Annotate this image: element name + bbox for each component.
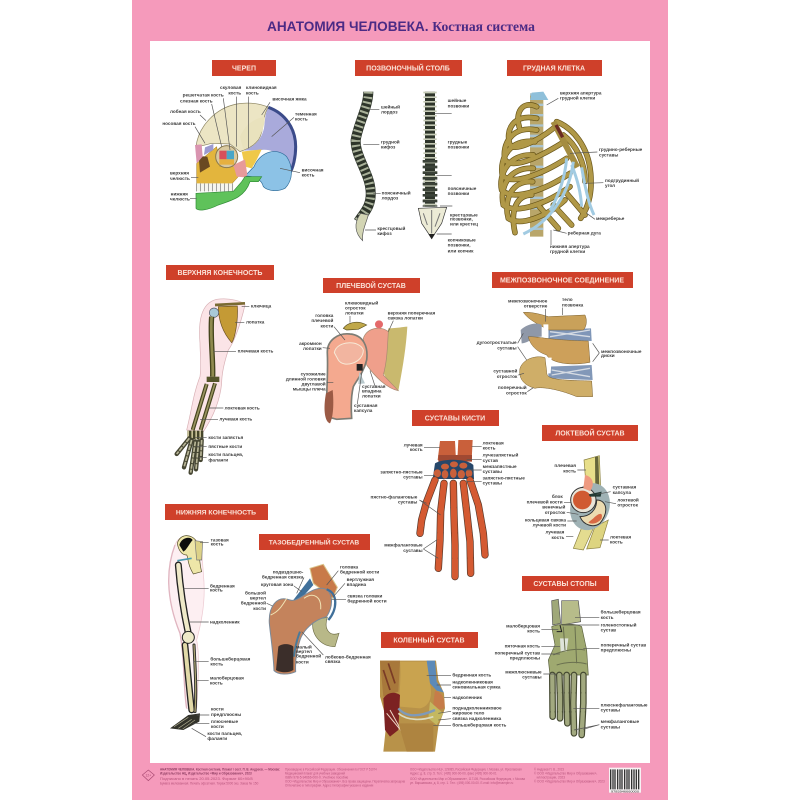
heading: lower limb xyxy=(165,504,268,520)
labels: shoulder joint: двуглавой xyxy=(301,381,326,387)
labels: hand joints xyxy=(371,440,525,558)
labels: hand joints: кость xyxy=(410,447,423,452)
labels: skull: лобная кость xyxy=(170,108,201,114)
labels: elbow joint: локтевая xyxy=(610,535,631,540)
heading: skull: ЧЕРЕП xyxy=(232,66,256,72)
labels: shoulder joint: акромион xyxy=(299,341,322,346)
labels: spine: лордоз xyxy=(381,110,398,115)
labels: elbow joint: кость xyxy=(610,540,623,545)
panel: elbow joint xyxy=(525,425,639,550)
panel: knee joint xyxy=(380,632,507,752)
labels: lower limb: кости xyxy=(211,724,224,729)
labels: shoulder joint: клювовидный xyxy=(345,300,378,306)
illustration: hand xyxy=(420,440,485,577)
labels: hand joints: суставы xyxy=(483,469,502,474)
labels: elbow joint xyxy=(525,463,639,545)
labels: intervertebral joint xyxy=(477,297,642,395)
labels: elbow joint: плечевая xyxy=(554,463,576,468)
labels: lower limb: большеберцовая xyxy=(210,656,251,662)
imprint column 4: © Андреев П. В., 2023 xyxy=(534,768,564,772)
imprint column 3: Адрес: д. 8, стр. 5. Тел.: (495) 000-00-00, факс (495) 000-00-01 xyxy=(410,772,497,776)
labels: hand joints: запястно-пястные xyxy=(483,475,525,480)
imprint column 3 xyxy=(410,768,526,785)
labels: foot joints: суставы xyxy=(601,708,620,713)
labels: skull: клиновидная xyxy=(246,85,277,90)
imprint column 2 xyxy=(285,768,406,788)
labels: spine: грудной xyxy=(381,138,400,144)
illustration: foot xyxy=(548,599,588,735)
labels: hip joint: бедренная связка xyxy=(262,574,304,580)
labels: hand joints: локтевая xyxy=(483,440,504,445)
labels: upper limb: лучевая кость xyxy=(219,417,252,422)
labels: hip joint: бедренной xyxy=(241,600,266,606)
labels: lower limb: плюсневые xyxy=(211,719,239,724)
panel: hip joint xyxy=(241,534,387,674)
labels: elbow joint: кость xyxy=(563,468,576,473)
panel: hand joints xyxy=(371,410,525,577)
labels: shoulder joint: суставная xyxy=(354,403,378,408)
labels: lower limb: кости пальцев, xyxy=(207,731,242,736)
labels: foot joints: межплюсневые xyxy=(505,669,542,674)
labels: elbow joint: капсула xyxy=(613,490,631,495)
labels: spine: позвонки xyxy=(448,144,469,149)
labels: lower limb: кости xyxy=(211,707,224,712)
labels: foot joints: суставы xyxy=(522,675,542,680)
panel: foot joints xyxy=(495,576,648,735)
labels: skull: кость xyxy=(302,173,315,178)
heading: hand joints: СУСТАВЫ КИСТИ xyxy=(425,416,485,422)
labels: spine: крестцовые xyxy=(450,213,478,218)
heading: rib cage: ГРУДНАЯ КЛЕТКА xyxy=(523,66,585,72)
panel: upper limb xyxy=(166,265,274,473)
labels: knee joint: надколенниковая xyxy=(452,680,493,685)
labels: spine: крестцовый xyxy=(377,225,405,231)
labels: hip joint: бедренной кости xyxy=(340,568,379,574)
labels: skull: кость xyxy=(228,90,241,95)
labels: skull: челюсть xyxy=(170,197,190,202)
heading: rib cage xyxy=(507,60,602,76)
heading: foot joints xyxy=(522,576,609,591)
labels: foot joints: предплюсны xyxy=(601,648,631,653)
labels: rib cage: нижняя апертура xyxy=(550,244,590,249)
labels: upper limb: кости запястья xyxy=(208,435,244,440)
heading: lower limb: НИЖНЯЯ КОНЕЧНОСТЬ xyxy=(176,510,256,516)
labels: spine: грудные xyxy=(448,139,468,144)
imprint column 2: ООО «Издательство Мир и Образование». Все права защищены. Перепечатка запрещена xyxy=(285,780,406,784)
labels: rib cage: межреберье xyxy=(596,215,625,221)
imprint column 3: ул. Варшавская, д. 8, стр. 1. Тел.: (495) 000-00-00. E-mail: info@example.ru xyxy=(410,781,513,785)
labels: upper limb: плечевая кость xyxy=(238,349,273,354)
labels: knee joint: жировое тело xyxy=(451,710,484,715)
illustration: vertebrae xyxy=(520,312,593,397)
labels: upper limb: кости пальцев, xyxy=(208,452,243,457)
imprint column 2: ISBN 978-5-94666-000-0. Учебное пособие xyxy=(285,776,348,780)
illustration: elbow xyxy=(564,456,616,550)
labels: upper limb: фаланги xyxy=(208,456,228,462)
labels: skull: теменная xyxy=(295,112,317,117)
labels: spine: позвонки, xyxy=(448,243,471,248)
labels: shoulder joint: длинной головки xyxy=(286,376,326,382)
imprint column 4: © ООО «Издательство Мир и Образование», 2023 xyxy=(534,780,605,784)
panel: shoulder joint xyxy=(286,278,435,423)
barcode xyxy=(609,768,641,793)
labels: foot joints: предплюсны xyxy=(510,656,540,661)
labels: spine: позвонки, xyxy=(450,217,473,222)
heading: upper limb xyxy=(166,265,274,280)
labels: rib cage: подгрудинный xyxy=(605,177,639,183)
panel: lower limb xyxy=(165,504,268,741)
labels: knee joint xyxy=(427,672,507,728)
labels: shoulder joint xyxy=(286,300,435,413)
labels: foot joints: поперечный сустав xyxy=(495,649,540,655)
labels: hip joint: вертел xyxy=(250,596,266,601)
heading: hip joint xyxy=(259,534,370,550)
labels: rib cage: грудной клетки xyxy=(560,95,595,101)
labels: knee joint: связка надколенника xyxy=(452,716,502,721)
labels: elbow joint: кость xyxy=(552,535,564,540)
labels: shoulder joint: головка xyxy=(315,313,334,318)
labels: lower limb: кость xyxy=(211,542,224,547)
labels: hand joints: сустав xyxy=(483,458,498,463)
barcode: 9785946660000 xyxy=(611,789,639,793)
illustration: spine side view xyxy=(356,92,371,241)
labels: foot joints: сустав xyxy=(601,627,616,632)
labels: spine: шейный xyxy=(381,104,400,110)
panel: skull xyxy=(162,60,324,210)
labels: foot joints: плюснефаланговые xyxy=(601,702,648,708)
labels: intervertebral joint: тело xyxy=(562,297,573,302)
labels: hand joints: межзапястные xyxy=(483,464,517,469)
labels: skull: височная ямка xyxy=(272,97,307,102)
labels: shoulder joint: отросток xyxy=(345,306,366,311)
labels: hip joint: большой xyxy=(245,590,266,596)
labels: lower limb: малоберцовая xyxy=(210,675,244,681)
heading: shoulder joint xyxy=(323,278,420,293)
illustration: shoulder joint xyxy=(325,320,407,423)
labels: foot joints: пяточная кость xyxy=(505,644,540,649)
labels: hip joint: круговая зона xyxy=(261,582,294,587)
labels: intervertebral joint: диски xyxy=(601,353,615,358)
illustration: arm skeleton xyxy=(177,299,245,473)
labels: hip joint: кости xyxy=(296,660,309,665)
labels: elbow joint: лучевая xyxy=(545,529,565,534)
labels: upper limb: ключица xyxy=(251,304,272,309)
imprint column 3: ООО «Издательство НЦ», 129085, Российская Федерация, г. Москва, ул. Ярославская xyxy=(410,768,522,772)
imprint column 4 xyxy=(534,768,605,784)
illustration: knee xyxy=(380,661,445,752)
labels: skull: нижняя xyxy=(171,192,188,197)
labels: intervertebral joint: суставной xyxy=(493,368,517,374)
labels: shoulder joint: связка лопатки xyxy=(388,315,423,320)
heading: intervertebral joint xyxy=(492,272,633,288)
imprint column 1: АНАТОМИЯ ЧЕЛОВЕКА. Костная система. Плакат / сост. П. В. Андреев. — Москва: xyxy=(160,768,280,772)
labels: rib cage: грудной клетки xyxy=(550,248,585,254)
labels: skull: слезная кость xyxy=(180,98,213,103)
labels: knee joint: поднадколенниковое xyxy=(452,705,502,710)
title: АНАТОМИЯ ЧЕЛОВЕКА. Костная система xyxy=(267,18,535,35)
labels: shoulder joint: лопатки xyxy=(362,393,381,398)
labels: hip joint: связка головки xyxy=(347,593,383,598)
labels: foot joints: кость xyxy=(601,615,614,620)
labels: elbow joint: кольцевая связка xyxy=(525,518,566,523)
labels: hand joints: пястно-фаланговые xyxy=(371,493,418,499)
labels: skull: кость xyxy=(246,90,259,95)
labels: shoulder joint: сухожилие xyxy=(301,372,326,377)
labels: hand joints: суставы xyxy=(398,499,417,504)
labels: spine: позвонки xyxy=(448,103,469,108)
labels: skull: решетчатая кость xyxy=(183,93,224,98)
labels: intervertebral joint: позвонка xyxy=(562,302,584,307)
labels: hip joint: кости xyxy=(253,606,266,611)
illustration: spine front view xyxy=(418,92,447,239)
labels: intervertebral joint: межпозвоночное xyxy=(508,299,548,304)
labels: upper limb xyxy=(195,304,273,462)
pink poster background xyxy=(132,0,668,800)
labels: upper limb: локтевая кость xyxy=(225,405,260,410)
labels: spine: или копчик xyxy=(448,248,474,253)
labels: intervertebral joint: отросток xyxy=(506,390,527,395)
labels: elbow joint: локтевой xyxy=(617,496,639,502)
labels: hip joint: подвздошно- xyxy=(273,570,304,575)
imprint column 2: Отпечатано в типографии. Адрес типографии указан в издании xyxy=(285,784,373,788)
panel: rib cage xyxy=(501,60,643,254)
heading: foot joints: СУСТАВЫ СТОПЫ xyxy=(533,581,597,588)
heading: knee joint: КОЛЕННЫЙ СУСТАВ xyxy=(393,636,465,644)
heading: hip joint: ТАЗОБЕДРЕННЫЙ СУСТАВ xyxy=(269,538,359,546)
panel: spine xyxy=(355,60,478,253)
labels: foot joints: голеностопный xyxy=(601,621,637,627)
labels: spine: лордоз xyxy=(382,195,399,200)
labels: spine: кифоз xyxy=(377,230,392,236)
labels: foot joints: малоберцовая xyxy=(506,622,540,628)
labels: shoulder joint: кости xyxy=(321,324,333,329)
labels: hand joints: лучезапястный xyxy=(483,452,518,458)
labels: lower limb: кость xyxy=(210,588,223,593)
labels: skull: височная xyxy=(302,168,324,173)
labels: knee joint: надколенник xyxy=(452,695,483,700)
imprint column 1: Бумага мелованная. Печать офсетная. Тираж 5000 экз. Заказ № 150 xyxy=(160,781,258,785)
labels: hip joint: впадина xyxy=(347,582,367,587)
illustration: skull xyxy=(195,103,296,210)
labels: lower limb: бедренная xyxy=(210,582,235,588)
labels: hip joint: малый xyxy=(296,643,312,649)
heading: spine: ПОЗВОНОЧНЫЙ СТОЛБ xyxy=(366,64,450,72)
labels: hip joint: головка xyxy=(340,564,359,569)
labels: elbow joint: плечевой кости xyxy=(527,498,563,504)
heading: elbow joint: ЛОКТЕВОЙ СУСТАВ xyxy=(555,428,625,438)
labels: rib cage: угол xyxy=(605,183,615,188)
heading: skull xyxy=(212,60,276,76)
heading: shoulder joint: ПЛЕЧЕВОЙ СУСТАВ xyxy=(336,281,406,290)
labels: intervertebral joint: межпозвоночные xyxy=(601,349,642,354)
labels: hand joints: межфаланговые xyxy=(384,542,423,548)
imprint column 2: Произведено в Российской Федерации. Обозначения по ГОСТ Р 51074 xyxy=(285,768,377,772)
labels: skull xyxy=(162,85,324,202)
labels: foot joints: суставы xyxy=(601,724,620,729)
labels: hand joints: суставы xyxy=(403,475,423,480)
labels: skull: скуловая xyxy=(220,85,242,90)
labels: hip joint: бедренной xyxy=(296,653,321,659)
labels: lower limb xyxy=(183,537,251,741)
heading: upper limb: ВЕРХНЯЯ КОНЕЧНОСТЬ xyxy=(178,270,262,277)
labels: foot joints: большеберцовая xyxy=(601,609,641,615)
panel: intervertebral joint xyxy=(477,272,642,397)
imprint column 1: Подписано в печать 20.05.2023. Формат 60×90/8 xyxy=(160,777,253,781)
labels: intervertebral joint: дугоотростчатые xyxy=(477,340,517,345)
labels: foot joints xyxy=(495,609,648,730)
labels: intervertebral joint: суставы xyxy=(497,345,517,350)
labels: lower limb: кость xyxy=(210,680,223,685)
labels: hip joint: связка xyxy=(325,659,341,664)
icon: publisher logo xyxy=(142,770,154,781)
labels: lower limb: тазовая xyxy=(211,537,229,542)
labels: knee joint: большеберцовая кость xyxy=(452,722,507,728)
heading: spine xyxy=(355,60,462,76)
labels: rib cage: реберная дуга xyxy=(568,229,601,235)
labels: spine xyxy=(363,97,478,253)
icon: publisher logo: 12+ xyxy=(146,773,151,777)
heading: intervertebral joint: МЕЖПОЗВОНОЧНОЕ СОЕДИНЕНИЕ xyxy=(500,278,624,284)
white content panel xyxy=(150,41,650,763)
labels: intervertebral joint: поперечный xyxy=(498,384,527,390)
labels: rib cage: верхняя апертура xyxy=(560,91,602,96)
labels: shoulder joint: суставная xyxy=(362,384,386,389)
illustration: leg skeleton xyxy=(169,536,204,730)
labels: lower limb: кость xyxy=(210,662,223,667)
labels: shoulder joint: капсула xyxy=(354,408,373,413)
illustration: hip joint xyxy=(269,564,339,674)
labels: knee joint: синовиальная сумка xyxy=(452,685,501,690)
labels: rib cage: суставы xyxy=(599,152,618,157)
labels: skull: челюсть xyxy=(170,176,190,181)
labels: skull: носовая кость xyxy=(162,121,196,126)
labels: skull: кость xyxy=(295,117,308,122)
labels: foot joints: поперечный сустав xyxy=(601,642,646,648)
labels: rib cage xyxy=(547,91,643,254)
labels: elbow joint: венечный xyxy=(542,504,565,510)
labels: hand joints: суставы xyxy=(483,481,502,486)
imprint column 4: иллюстрации, 2023 xyxy=(537,776,565,780)
labels: foot joints: межфаланговые xyxy=(601,718,640,724)
labels: hip joint: бедренной кости xyxy=(347,597,387,603)
labels: skull: верхняя xyxy=(170,171,189,176)
labels: spine: позвонки xyxy=(448,191,469,196)
labels: lower limb: предплюсны xyxy=(211,712,241,717)
heading: hand joints xyxy=(412,410,499,426)
imprint column 4: © ООО «Издательство Мир и Образование», xyxy=(534,772,597,776)
labels: spine: поясничный xyxy=(382,189,411,195)
imprint column 3: ООО «Издательство Мир и Образование», 117105, Российская Федерация, г. Москва xyxy=(410,777,526,781)
labels: spine: поясничные xyxy=(448,186,477,191)
labels: foot joints: кость xyxy=(527,629,540,634)
labels: hand joints: суставы xyxy=(403,548,423,553)
labels: hip joint: лобково-бедренная xyxy=(325,653,371,659)
labels: shoulder joint: лопатки xyxy=(303,346,322,351)
labels: hip joint xyxy=(241,564,387,665)
labels: spine: кифоз xyxy=(381,143,396,149)
labels: knee joint: бедренная кость xyxy=(452,672,491,678)
labels: intervertebral joint: отросток xyxy=(497,374,518,379)
labels: spine: шейные xyxy=(448,97,467,103)
labels: shoulder joint: мышцы плеча xyxy=(293,386,326,391)
labels: intervertebral joint: отверстие xyxy=(524,304,548,309)
labels: upper limb: пястные кости xyxy=(208,444,242,449)
labels: spine: копчиковые xyxy=(448,238,476,243)
labels: upper limb: лопатка xyxy=(246,320,265,325)
labels: shoulder joint: впадина xyxy=(362,389,382,394)
labels: hand joints: кость xyxy=(483,445,496,450)
imprint column 1 xyxy=(160,768,280,785)
labels: lower limb: фаланги xyxy=(207,735,227,741)
footer imprint xyxy=(142,768,641,793)
labels: hip joint: вертлужная xyxy=(347,577,374,582)
labels: hip joint: вертел xyxy=(296,649,312,654)
labels: elbow joint: лучевой кости xyxy=(533,522,566,528)
labels: rib cage: грудино-реберные xyxy=(599,146,643,152)
labels: shoulder joint: плечевой xyxy=(311,317,333,323)
labels: hand joints: лучевая xyxy=(404,442,423,447)
imprint column 1: Издательство НЦ, Издательство «Мир и Образование», 2023 xyxy=(160,772,252,776)
labels: hand joints: запястно-пястные xyxy=(380,469,423,474)
labels: elbow joint: отросток xyxy=(617,502,639,507)
labels: shoulder joint: лопатки xyxy=(345,311,364,316)
labels: elbow joint: отросток xyxy=(545,510,566,515)
labels: lower limb: надколенник xyxy=(210,620,240,625)
labels: elbow joint: суставная xyxy=(613,485,636,490)
labels: spine: или крестец xyxy=(450,221,478,226)
imprint column 2: Медицинский плакат для учебных заведений xyxy=(285,772,345,776)
labels: shoulder joint: верхняя поперечная xyxy=(388,311,435,316)
labels: elbow joint: блок xyxy=(552,493,563,499)
illustration: rib cage xyxy=(501,92,594,237)
